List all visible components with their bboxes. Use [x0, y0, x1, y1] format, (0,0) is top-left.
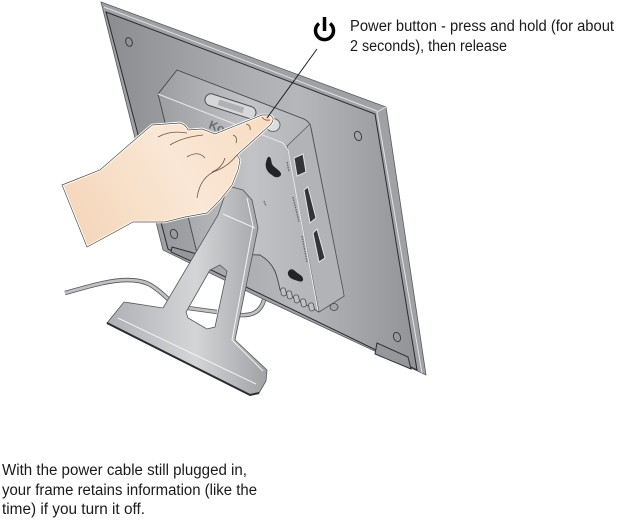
media box: [158, 70, 344, 312]
bottom vents: [280, 287, 315, 311]
power cable note: [2, 462, 257, 518]
power button: [266, 118, 280, 132]
power cable: [65, 255, 265, 315]
screw holes: [124, 37, 402, 343]
keyhole slots: [266, 157, 281, 177]
icon: power symbol: [315, 17, 334, 40]
power cable note: time) if you turn it off.: [2, 501, 145, 518]
power cable note: your frame retains information (like the: [2, 482, 257, 499]
frame rim highlights: [104, 7, 422, 373]
power cable note: With the power cable still plugged in,: [2, 462, 247, 479]
usb and card ports: [294, 154, 325, 262]
frame body: [101, 2, 426, 375]
illustration: digital frame back view: [62, 2, 426, 395]
hand pressing power button: [62, 115, 273, 247]
stand: [107, 186, 267, 395]
box foot: [330, 304, 338, 310]
power button callout: 2 seconds), then release: [350, 38, 507, 55]
leader line: [267, 49, 317, 118]
port labels: [264, 162, 307, 262]
frame back panel: [106, 12, 417, 370]
frame foot notches: [171, 247, 411, 369]
power button callout: [350, 18, 615, 55]
display pill: [203, 92, 258, 120]
brand label: Kodak: [207, 118, 247, 143]
